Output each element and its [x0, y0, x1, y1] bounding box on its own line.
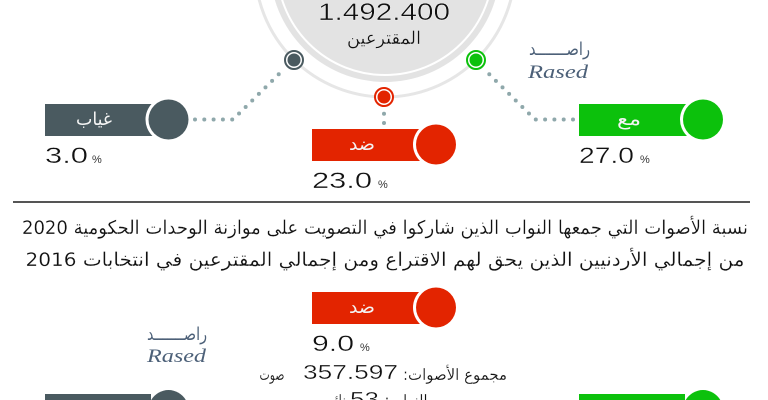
heading: نسبة الأصوات التي جمعها النواب الذين شاركوا في التصويت على موازنة الوحدات الحكومية 2020 — [22, 216, 748, 239]
legend: absent: % — [92, 154, 102, 166]
legend: against 2016 — [312, 284, 459, 356]
node: against — [375, 88, 393, 106]
legend: absent: غياب — [76, 109, 112, 130]
logo: Rased lower — [146, 324, 207, 367]
total voters circle: المقترعين — [347, 28, 421, 49]
logo: Rased top: راصـــــــد — [529, 39, 590, 60]
node: in favour — [467, 51, 485, 69]
legend: in favour 2016 — [579, 390, 720, 400]
node: absent — [285, 51, 303, 69]
legend: absent — [45, 96, 192, 168]
legend: against: ضد — [349, 134, 375, 155]
legend: against: % — [378, 179, 388, 191]
legend: against 2016: ضد — [349, 297, 375, 318]
legend: in favour: % — [640, 154, 650, 166]
logo: Rased top — [527, 39, 590, 83]
total votes: مجموع الأصوات: — [403, 364, 507, 385]
heading — [22, 216, 748, 272]
total votes: صوت — [260, 365, 284, 385]
logo: Rased lower: Rased — [146, 346, 207, 367]
legend: in favour — [579, 96, 726, 168]
heading: من إجمالي الأردنيين الذين يحق لهم الاقتراع ومن إجمالي المقترعين في انتخابات 2016 — [26, 248, 745, 272]
total votes — [260, 362, 507, 385]
number of MPs — [322, 389, 428, 400]
legend: against: 23.0 — [312, 168, 372, 193]
legend: in favour: 27.0 — [579, 143, 634, 168]
logo: Rased top: Rased — [527, 62, 589, 83]
connector: against — [382, 107, 386, 123]
total voters circle — [255, 0, 515, 97]
legend: in favour: مع — [617, 109, 641, 130]
connector: absent — [195, 72, 281, 120]
total votes: 357.597 — [303, 362, 398, 384]
legend: absent: 3.0 — [45, 143, 88, 168]
connector: in favour — [487, 72, 573, 120]
legend: against 2016: % — [360, 342, 370, 354]
legend: against — [312, 122, 459, 193]
divider — [13, 201, 750, 203]
legend: absent 2016 — [45, 390, 186, 400]
legend: against 2016: 9.0 — [312, 331, 354, 356]
logo: Rased lower: راصـــــــد — [147, 324, 207, 345]
